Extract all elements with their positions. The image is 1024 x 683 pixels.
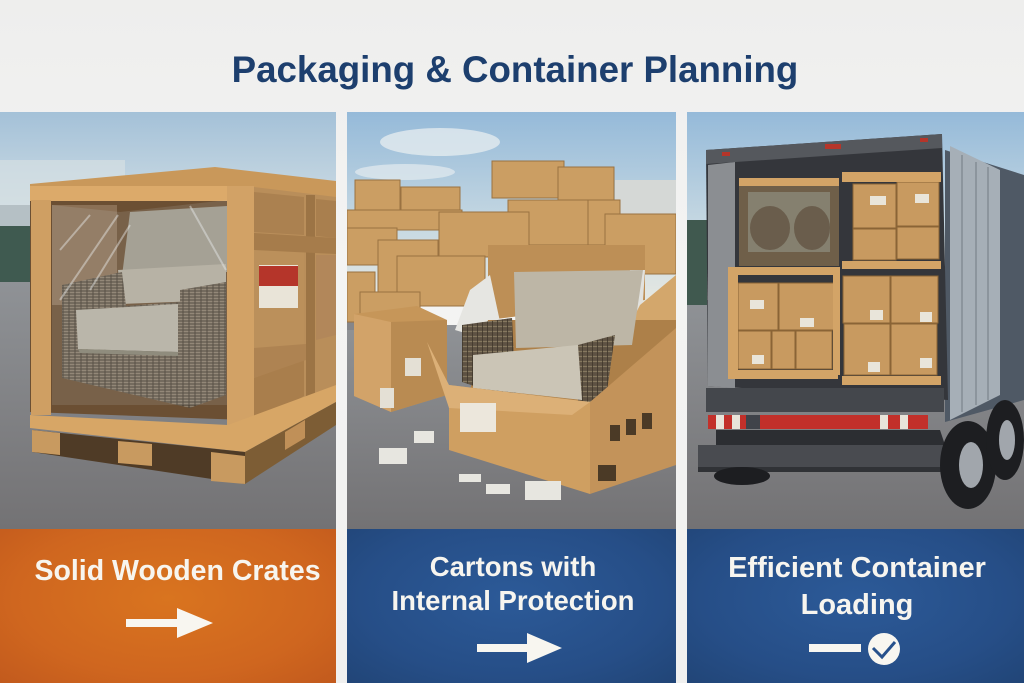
illustration: wicker chair in wooden crate: [0, 112, 336, 529]
open carton: [488, 245, 645, 320]
crate side panels: [245, 185, 336, 440]
illustration: chair in carton among stacked boxes: [347, 112, 676, 529]
wheels: [940, 421, 996, 509]
label: [728, 552, 986, 621]
carton label: [460, 403, 496, 432]
label: Internal Protection: [392, 585, 634, 616]
label: Efficient Container: [728, 552, 986, 584]
banner: solid wooden crates: [0, 529, 336, 683]
arrow: [126, 608, 213, 638]
label: Loading: [801, 589, 913, 621]
plastic wrap: [52, 200, 227, 405]
illustration: loaded container on truck: [687, 112, 1024, 529]
fragile label: [259, 265, 298, 308]
banner: efficient container loading: [687, 529, 1024, 683]
label: Cartons with: [430, 551, 596, 582]
arrow: [477, 633, 562, 663]
rear bumper: [706, 388, 944, 412]
box labels: [750, 194, 932, 372]
panel: cartons with internal protection: [347, 112, 676, 683]
carton front: [449, 385, 590, 494]
top frame: [30, 167, 336, 201]
handling icons: [598, 413, 652, 481]
panel: solid wooden crates: [0, 112, 336, 683]
chair: [514, 270, 643, 348]
chair: [122, 206, 227, 276]
label: Solid Wooden Crates: [34, 555, 321, 587]
panel: efficient container loading: [687, 112, 1024, 683]
container interior: [706, 134, 948, 400]
banner: cartons with internal protection: [347, 529, 676, 683]
pallets: [728, 172, 941, 385]
container side: [945, 150, 1024, 422]
title: Packaging & Container Planning: [232, 49, 798, 90]
dash and check icon: [809, 633, 900, 665]
label: [392, 551, 634, 616]
foam pieces: [379, 431, 561, 500]
crate interior: [30, 185, 245, 420]
upper left crate: [739, 178, 839, 266]
boxes: [738, 182, 939, 375]
background boxes: [347, 161, 676, 322]
crate base and pallet: [30, 385, 336, 452]
